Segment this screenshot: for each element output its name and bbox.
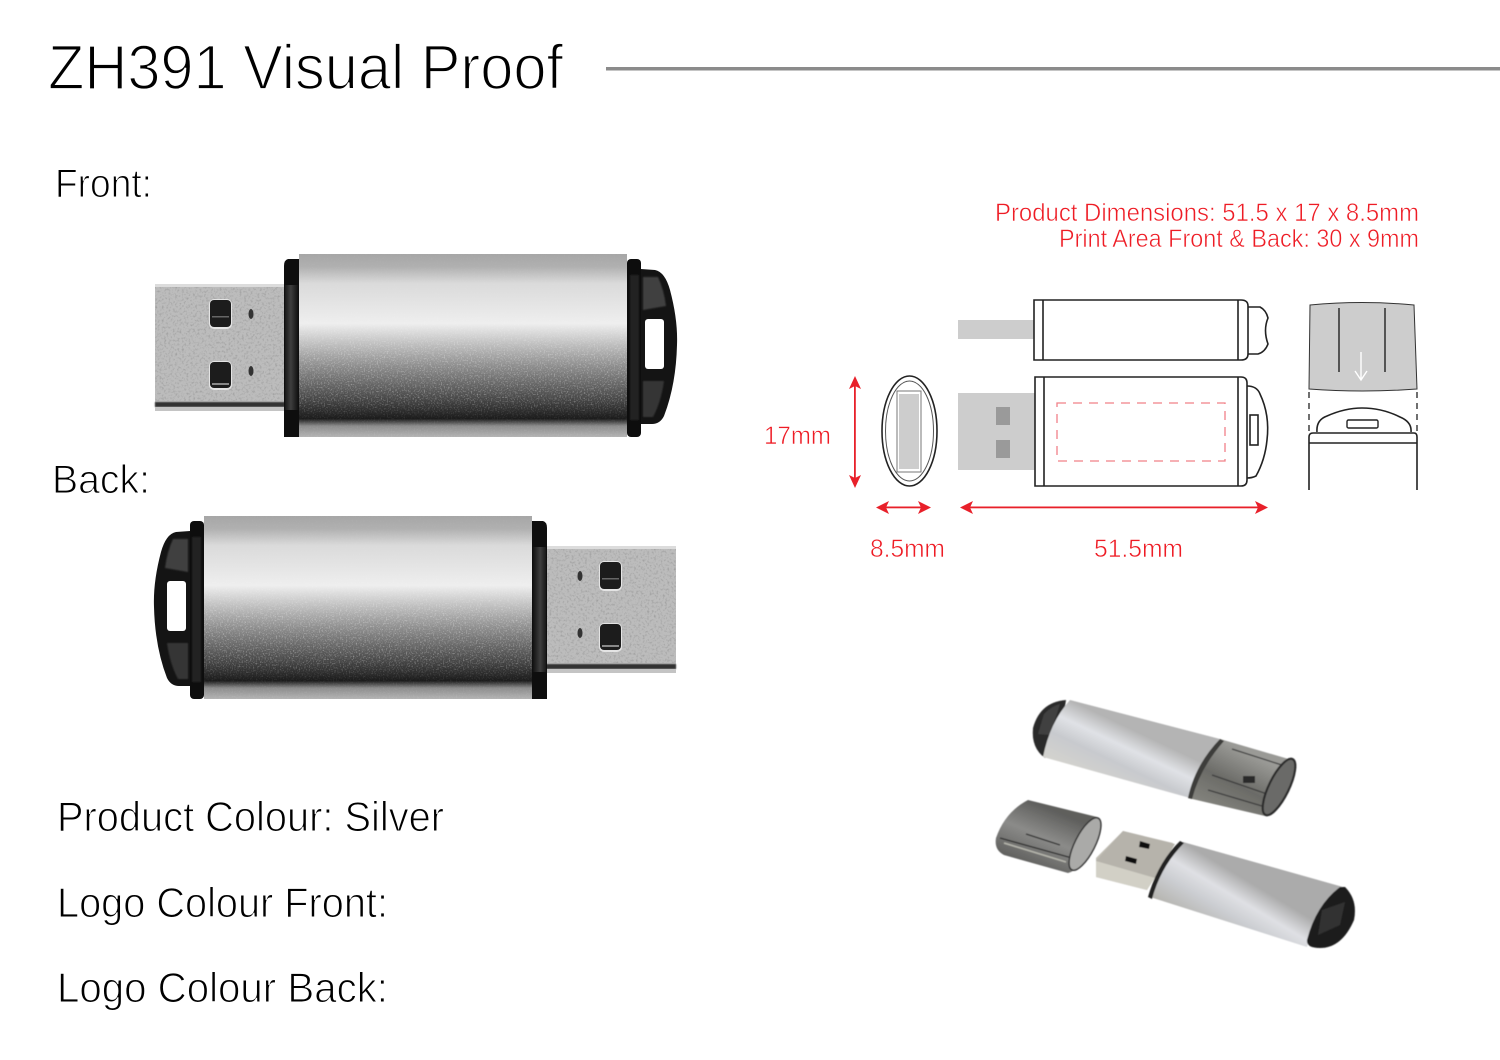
product photo: open drive [1096,831,1355,948]
product photo: removed cap [996,800,1107,874]
title rule [606,67,1500,70]
product photo: closed drive [1033,700,1302,819]
diagram: cap detail [1309,302,1417,490]
heading: back: Back: [52,458,150,502]
diagram: side view with print area [958,377,1268,486]
cap end [641,269,677,424]
dimensions text [995,199,1419,253]
arrow: 8.500mm width [876,501,931,514]
logo colour front label: Logo Colour Front: [57,879,388,926]
icon: down arrow [1355,352,1367,380]
heading: front: Front: [55,162,152,206]
left collar [284,259,299,437]
aluminium body [299,254,627,437]
diagram: end view oval [882,376,937,486]
arrow: 51.500mm length [960,501,1268,514]
product photo: back USB drive [154,516,676,699]
label: 17mm: 17mm [764,422,831,450]
title: ZH391 Visual Proof [48,33,563,103]
diagram: top view [958,300,1268,360]
dimensions text: Print Area Front & Back: 30 x 9mm [1059,225,1419,253]
label: 8.5mm: 8.5mm [870,535,945,563]
product colour label: Product Colour: Silver [57,793,444,840]
label: 51.5mm: 51.5mm [1094,535,1183,563]
USB plug [155,284,285,411]
arrow: 17mm height [849,376,861,488]
print area [1057,403,1225,461]
product photo: front USB drive [155,254,677,437]
right collar [627,259,641,437]
dimensions text: Product Dimensions: 51.5 x 17 x 8.5mm [995,199,1419,227]
logo colour back label: Logo Colour Back: [57,964,388,1011]
